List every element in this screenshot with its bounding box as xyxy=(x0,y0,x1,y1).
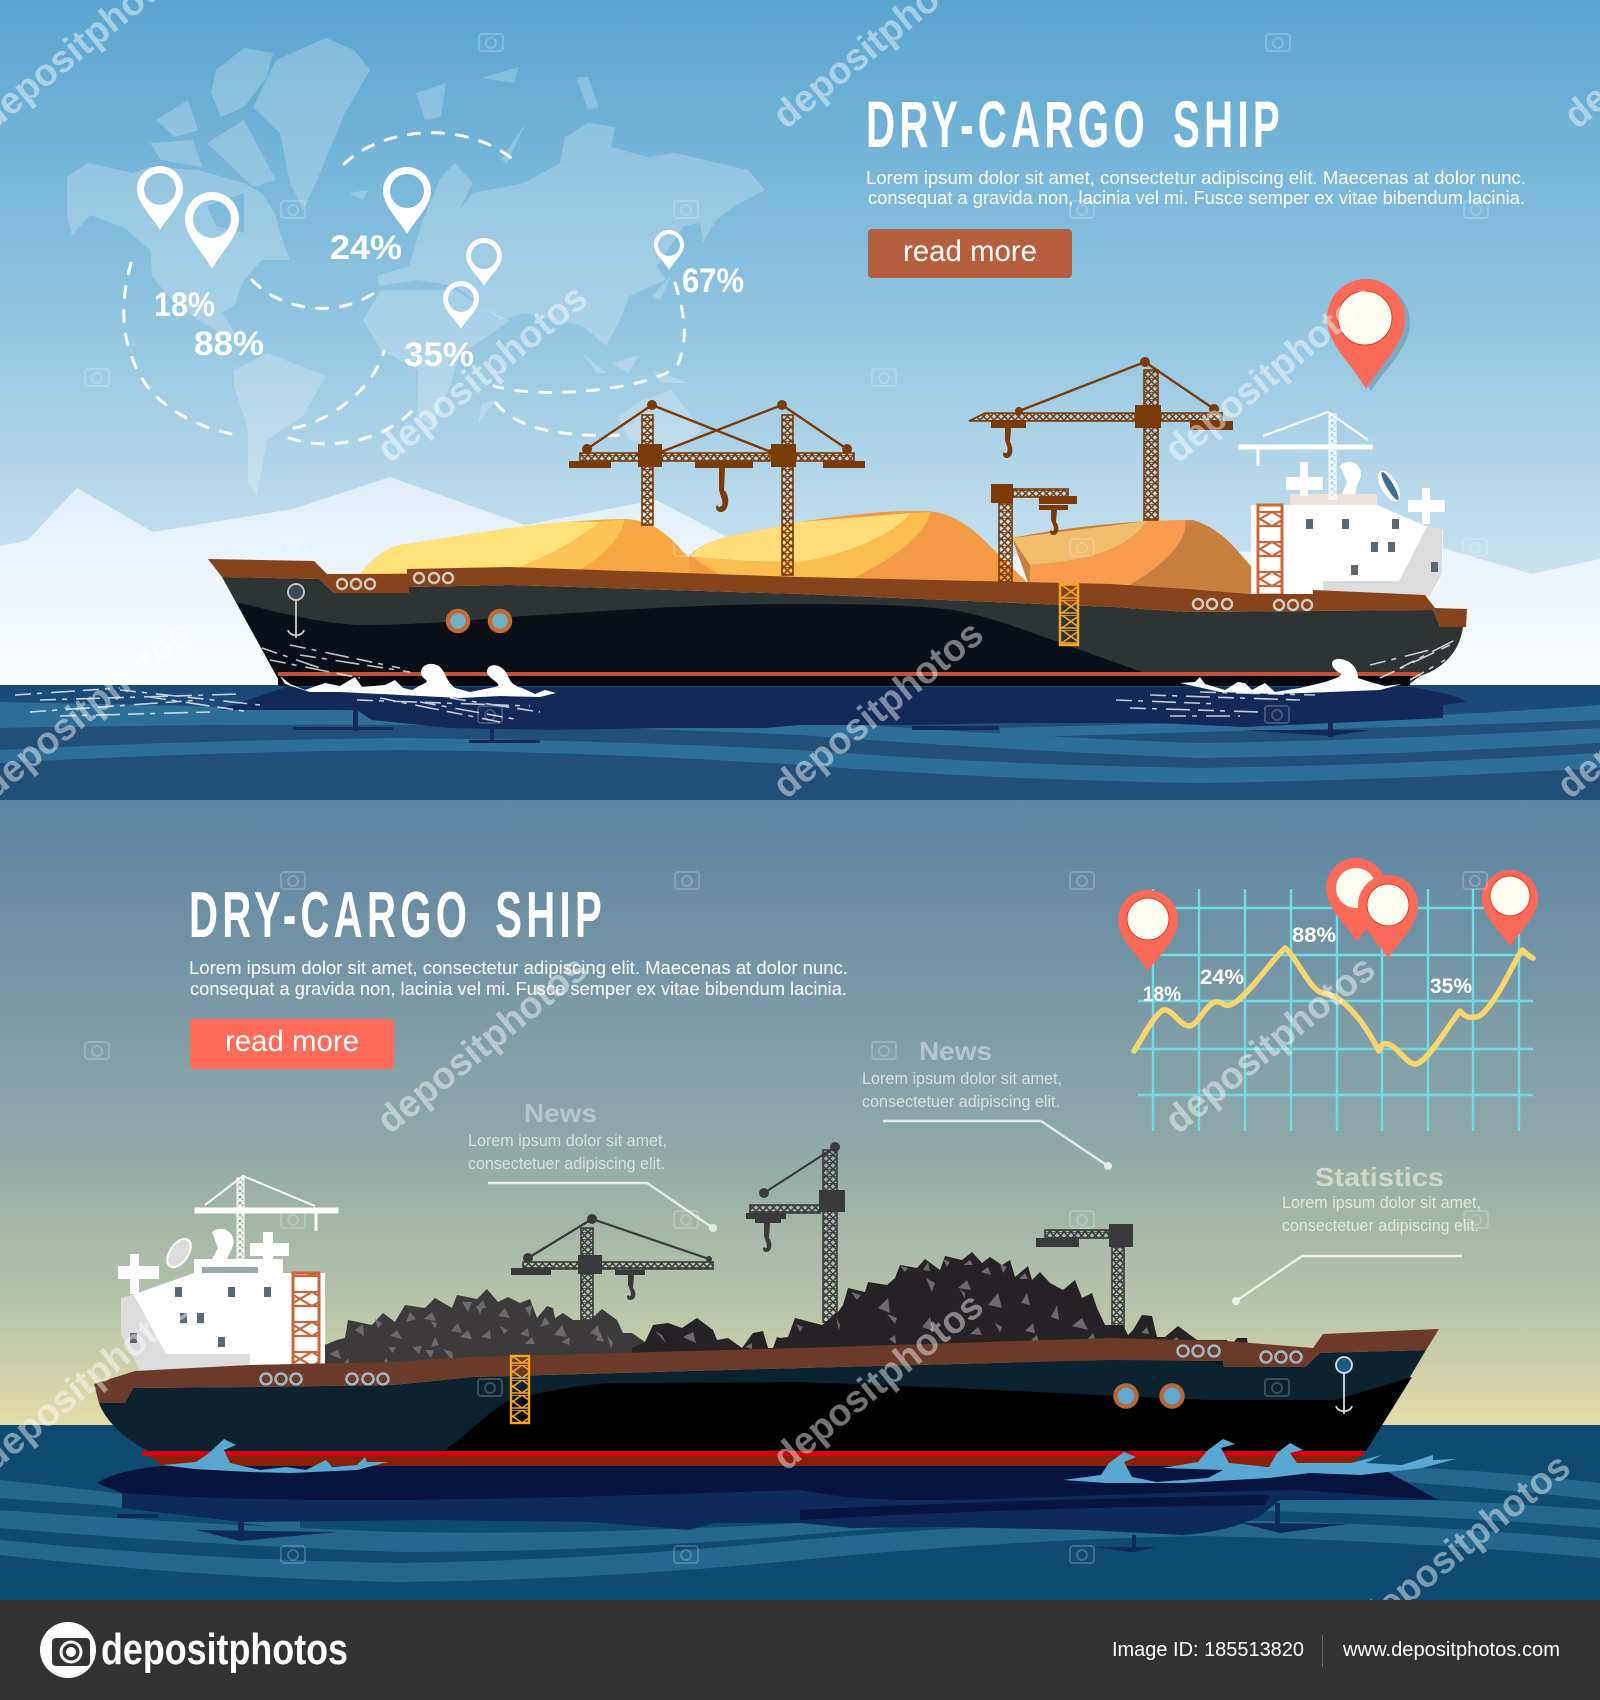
callout: news right: consectetuer adipiscing elit. xyxy=(862,1092,1060,1111)
map percentages: 67% xyxy=(682,262,744,300)
callout: news left: News xyxy=(524,1098,597,1128)
icon: red location pin top xyxy=(1327,279,1410,391)
chart line xyxy=(1134,948,1533,1064)
callout: statistics: Statistics xyxy=(1315,1162,1444,1192)
icon: anchor xyxy=(1336,1357,1352,1414)
text block: bottom description: consequat a gravida non, lacinia vel mi. Fusce semper ex vitae bibendum lacinia. xyxy=(190,979,847,999)
map percentages: 18% xyxy=(154,286,215,324)
text block: bottom description: Lorem ipsum dolor sit amet, consectetur adipiscing elit. Maecenas at dolor nunc. xyxy=(189,958,848,978)
map percentages xyxy=(154,229,744,374)
callout: news left: Lorem ipsum dolor sit amet, xyxy=(468,1131,667,1150)
bow wave foam xyxy=(280,664,556,698)
cranes xyxy=(511,1142,1133,1332)
title: bottom heading: DRY-CARGO SHIP xyxy=(189,878,606,951)
callout: news left: consectetuer adipiscing elit. xyxy=(468,1154,665,1173)
yellow ladder xyxy=(511,1356,529,1423)
button: bottom read more xyxy=(190,1019,394,1069)
icebergs xyxy=(0,477,1600,685)
callout: statistics xyxy=(1232,1162,1481,1305)
icon: anchor xyxy=(288,584,304,638)
chart percentages: 24% xyxy=(1200,966,1244,989)
panel: bottom sea xyxy=(0,1425,1600,1600)
icon: footer logo xyxy=(40,1622,96,1678)
dashed route lines xyxy=(124,133,684,444)
callout: news right: News xyxy=(919,1036,992,1066)
ship reflection top xyxy=(219,687,1466,743)
watermarks: depositphotos xyxy=(369,277,595,471)
icon: chart pins xyxy=(1118,858,1538,971)
white crane on ship xyxy=(1239,412,1372,499)
text block: top description: Lorem ipsum dolor sit amet, consectetur adipiscing elit. Maecenas at dolor nunc. xyxy=(866,168,1526,188)
watermarks: depositphotos xyxy=(765,1285,991,1479)
button: top read more: read more xyxy=(903,235,1037,268)
chart percentages xyxy=(1143,924,1472,1006)
water spray streaks xyxy=(15,640,1455,722)
superstructure xyxy=(1239,412,1445,596)
line chart xyxy=(1118,858,1538,1131)
footer image id: Image ID: 185513820 xyxy=(1112,1639,1304,1661)
panel: bottom banner background sky xyxy=(0,800,1600,1425)
coal piles xyxy=(290,1252,1248,1375)
world map xyxy=(67,38,765,496)
footer url: www.depositphotos.com xyxy=(1342,1639,1560,1661)
title: top heading: DRY-CARGO SHIP xyxy=(866,87,1284,161)
white crane on ship xyxy=(195,1176,338,1260)
icon: white map pins xyxy=(137,166,684,329)
chart percentages: 88% xyxy=(1292,924,1336,947)
cranes xyxy=(569,357,1233,583)
callout: statistics: Lorem ipsum dolor sit amet, xyxy=(1282,1193,1481,1212)
map percentages: 88% xyxy=(194,325,264,363)
button: top read more xyxy=(868,229,1072,278)
hull xyxy=(99,1350,1426,1451)
chart percentages: 35% xyxy=(1430,975,1472,998)
text block: bottom description xyxy=(189,958,848,999)
watermarks: depositphotos xyxy=(765,613,991,807)
text block: top description xyxy=(866,168,1526,208)
callout: news left xyxy=(468,1098,717,1232)
footer brand name: depositphotos xyxy=(101,1625,348,1674)
deck portholes xyxy=(260,1346,1302,1384)
map percentages: 24% xyxy=(330,229,402,267)
watermarks: depositphotos xyxy=(369,948,595,1142)
watermarks: depositphotos xyxy=(1157,277,1383,471)
ship reflection bottom xyxy=(97,1466,1438,1552)
watermark camera icons xyxy=(85,34,1488,1563)
ship: coal cargo vessel xyxy=(94,1142,1456,1483)
yellow ladder xyxy=(1060,584,1078,645)
callout: news right: Lorem ipsum dolor sit amet, xyxy=(862,1069,1062,1088)
watermarks: depositphotos xyxy=(1352,1446,1578,1640)
map percentages: 35% xyxy=(404,336,474,374)
deck portholes xyxy=(337,573,1312,610)
footer bar xyxy=(0,1600,1600,1700)
large portholes xyxy=(1116,1386,1182,1406)
chart percentages: 18% xyxy=(1143,983,1181,1006)
button: bottom read more: read more xyxy=(225,1025,359,1058)
hull xyxy=(222,577,1463,686)
bow waves blue xyxy=(163,1439,388,1473)
footer divider xyxy=(1322,1635,1323,1667)
large portholes xyxy=(448,611,510,631)
panel: top sea xyxy=(0,685,1600,800)
callout: news right xyxy=(862,1036,1112,1170)
superstructure xyxy=(118,1176,338,1376)
watermarks: depositphotos xyxy=(1157,948,1383,1142)
panel: top banner background sky xyxy=(0,0,1600,600)
chart grid xyxy=(1138,889,1533,1131)
callout: statistics: consectetuer adipiscing elit. xyxy=(1282,1216,1479,1235)
text block: top description: consequat a gravida non, lacinia vel mi. Fusce semper ex vitae bibendum lacinia. xyxy=(868,188,1525,208)
ship: sand cargo vessel xyxy=(15,357,1467,722)
sand piles xyxy=(360,511,1251,596)
